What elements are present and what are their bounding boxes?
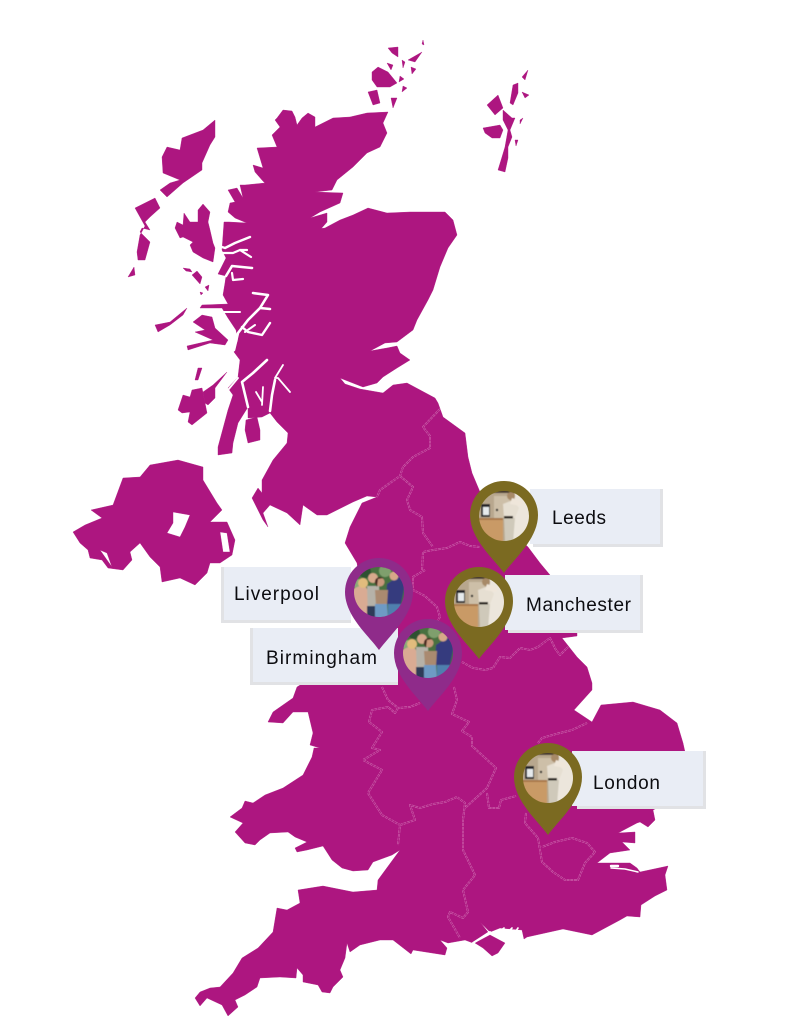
Barra (128, 267, 135, 277)
Tiree (155, 308, 187, 332)
label: London: London (593, 773, 660, 794)
label: London (572, 751, 706, 809)
label: Birmingham (250, 628, 398, 685)
Uists (135, 198, 160, 260)
label: Liverpool: Liverpool (234, 584, 319, 605)
Colonsay (195, 368, 202, 380)
sea lochs (220, 237, 638, 943)
pin: Manchester (445, 567, 513, 659)
Orkney (368, 40, 424, 108)
label: Manchester (505, 575, 643, 633)
Islay (178, 388, 207, 425)
marker: Birmingham (250, 619, 462, 711)
Skye (175, 204, 215, 262)
Jura (203, 372, 227, 405)
Northern Ireland (73, 460, 235, 585)
pin: Birmingham (394, 619, 462, 711)
Isle of Wight (475, 935, 505, 956)
pin: Leeds (470, 481, 538, 573)
label: Leeds (530, 489, 663, 547)
regional borders (363, 409, 595, 938)
marker: Liverpool (221, 558, 413, 650)
Great Britain mainland (195, 110, 685, 1016)
pin: Liverpool (345, 558, 413, 650)
Shetland (483, 70, 529, 172)
Arran (245, 417, 260, 443)
Coll (192, 271, 202, 284)
marker: London (514, 743, 706, 835)
map: United Kingdom (73, 40, 685, 1016)
label: Birmingham: Birmingham (266, 648, 377, 669)
label: Liverpool (221, 567, 351, 623)
label: Leeds: Leeds (552, 508, 606, 529)
label: Manchester: Manchester (526, 595, 632, 616)
marker: Leeds (470, 481, 663, 573)
small isles (183, 268, 209, 295)
marker: Manchester (445, 567, 643, 659)
Lewis and Harris (160, 120, 215, 197)
Mull (187, 315, 228, 350)
pin: London (514, 743, 582, 835)
